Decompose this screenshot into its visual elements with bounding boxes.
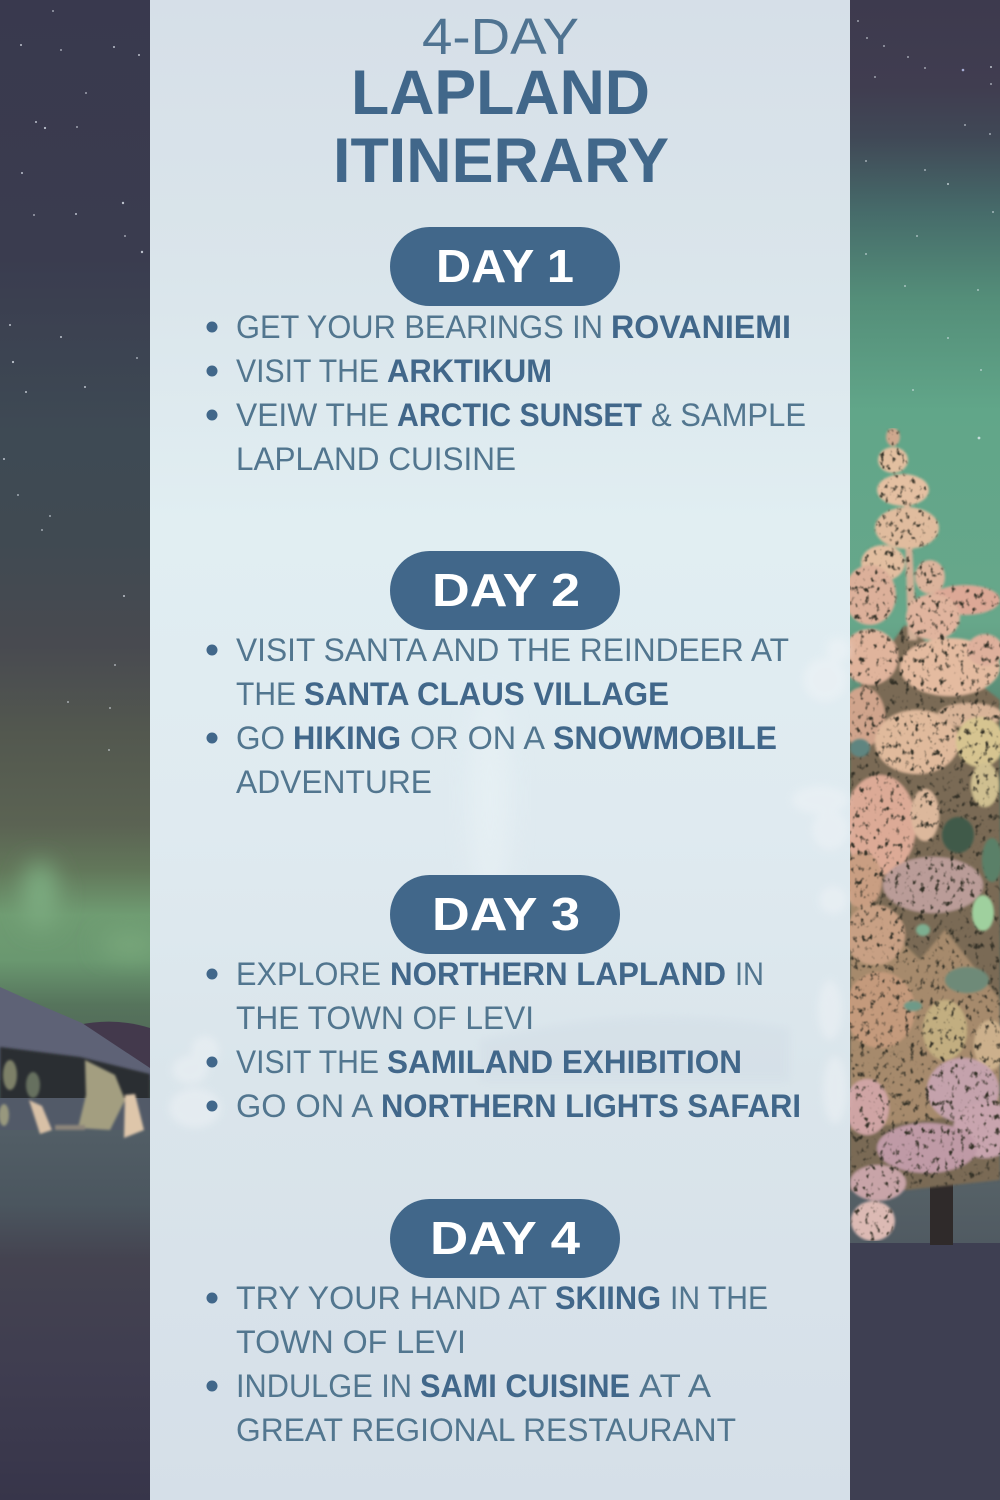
- snowy ground: [0, 1098, 150, 1130]
- day 1 list: [206, 309, 806, 477]
- background right: aurora sky, snowy spruce and ground: [850, 20, 1000, 1245]
- day 1 pill: DAY 1: [436, 240, 574, 292]
- title: [333, 8, 669, 196]
- distant dark hill: [84, 1022, 150, 1068]
- day 4 list: TOWN OF LEVI: [236, 1324, 466, 1360]
- day 3 list: EXPLORE: [236, 956, 381, 992]
- day 1 list: VEIW THE: [236, 397, 389, 433]
- day 1 list: VISIT THE: [236, 353, 379, 389]
- inner canopy: [850, 625, 1000, 1195]
- snowy spruce: [841, 428, 1000, 1241]
- day 3 list: NORTHERN LIGHTS SAFARI: [381, 1088, 801, 1124]
- day 1 list: LAPLAND CUISINE: [236, 441, 516, 477]
- day 2 list: OR ON A: [410, 720, 546, 756]
- day 3 list: [206, 956, 801, 1124]
- day 1 list: & SAMPLE: [651, 397, 806, 433]
- green gaps in canopy: [850, 739, 1000, 1011]
- day 2 list: SNOWMOBILE: [553, 720, 777, 756]
- day 1 list: GET YOUR BEARINGS IN: [236, 309, 603, 345]
- tree trunk: [930, 1178, 953, 1245]
- mountain slope: [0, 987, 150, 1080]
- title: LAPLAND: [351, 58, 650, 128]
- day 1 list: ARCTIC SUNSET: [397, 397, 642, 433]
- day 3 pill: DAY 3: [432, 888, 580, 940]
- faded tree echoes: [169, 638, 850, 1128]
- day 2 list: THE: [236, 676, 296, 712]
- central stem: [904, 500, 917, 640]
- day 4 list: AT A: [639, 1368, 712, 1404]
- day 3 pill: [390, 875, 620, 954]
- day 4 list: IN THE: [670, 1280, 768, 1316]
- day 3 list: VISIT THE: [236, 1044, 379, 1080]
- day 4 list: SKIING: [555, 1280, 661, 1316]
- day 2 list: VISIT SANTA AND THE REINDEER AT: [236, 632, 789, 668]
- central translucent panel: [150, 0, 850, 1500]
- stars left: [3, 10, 143, 751]
- treeline: [0, 1047, 150, 1102]
- day 4 pill: [390, 1199, 620, 1278]
- background left: night sky and aurora: [0, 10, 150, 1302]
- day 2 list: [206, 632, 789, 800]
- day 4 list: INDULGE IN: [236, 1368, 412, 1404]
- day 4 pill: DAY 4: [430, 1212, 580, 1264]
- day 1 pill: [390, 227, 620, 306]
- mid canopy: [850, 890, 1000, 1130]
- day 4 list: GREAT REGIONAL RESTAURANT: [236, 1412, 736, 1448]
- day 2 list: HIKING: [293, 720, 401, 756]
- day 3 list: GO ON A: [236, 1088, 374, 1124]
- day 3 list: NORTHERN LAPLAND: [390, 956, 726, 992]
- ground: [850, 1243, 1000, 1245]
- stars right: [857, 20, 994, 439]
- day 2 list: GO: [236, 720, 285, 756]
- day 4 list: TRY YOUR HAND AT: [236, 1280, 547, 1316]
- day 3 list: THE TOWN OF LEVI: [236, 1000, 534, 1036]
- title: 4-DAY: [422, 8, 579, 65]
- day 1 list: ARKTIKUM: [387, 353, 552, 389]
- day 4 list: [206, 1280, 768, 1448]
- title: ITINERARY: [333, 126, 669, 196]
- day 2 pill: DAY 2: [432, 564, 580, 616]
- day 2 pill: [390, 551, 620, 630]
- snowy trees: [0, 1060, 144, 1138]
- day 3 list: IN: [735, 956, 764, 992]
- day 2 list: ADVENTURE: [236, 764, 432, 800]
- day 2 list: SANTA CLAUS VILLAGE: [304, 676, 669, 712]
- day 1 list: ROVANIEMI: [611, 309, 791, 345]
- day 4 list: SAMI CUISINE: [420, 1368, 630, 1404]
- day 3 list: SAMILAND EXHIBITION: [387, 1044, 742, 1080]
